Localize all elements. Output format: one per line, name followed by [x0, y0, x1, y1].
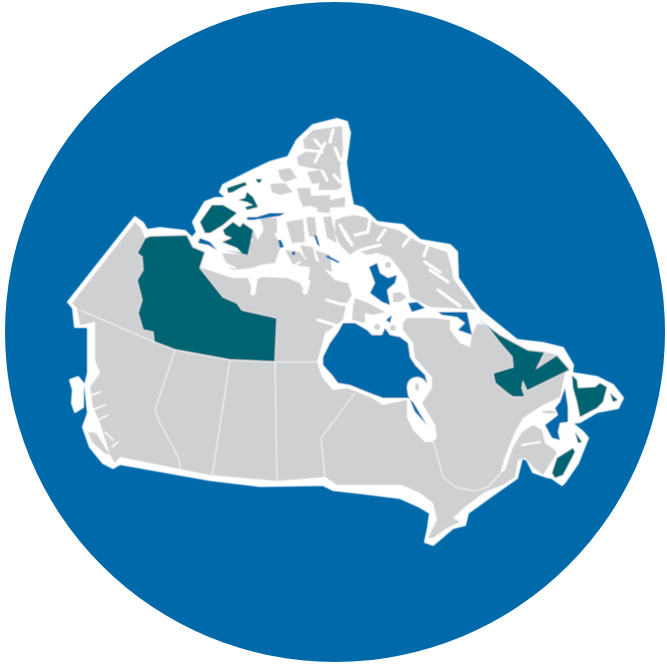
- Foxe Basin: [369, 263, 397, 305]
- map of Canada: [68, 119, 623, 545]
- highlighted region: Arctic islands: [200, 179, 262, 255]
- Vancouver Island: [88, 432, 110, 455]
- Foxe Peninsula: [393, 292, 407, 302]
- highlighted region: Northwest Territories: [137, 235, 277, 362]
- Devon: [307, 193, 345, 208]
- Hudson Strait waters: [386, 302, 472, 335]
- white coastline silhouette: [68, 119, 623, 545]
- highlighted region: Nova Scotia: [552, 432, 582, 478]
- James Bay island: [407, 377, 427, 397]
- highlighted region: Labrador: [479, 319, 570, 397]
- provincial and territorial borders: [80, 310, 500, 491]
- Arctic channels: [198, 213, 340, 263]
- Hudson Bay: [323, 323, 427, 425]
- small islands: [278, 168, 297, 182]
- Melville Peninsula: [352, 298, 385, 323]
- Ellesmere: [297, 126, 343, 190]
- grey arctic islands: [88, 126, 556, 455]
- highlighted region: Newfoundland: [572, 375, 618, 417]
- white fjords and inlets: [92, 130, 540, 447]
- grey mainland: [72, 222, 570, 538]
- Baffin: [335, 215, 477, 310]
- Gulf of St. Lawrence: [545, 388, 568, 440]
- St. Lawrence River: [500, 418, 533, 474]
- Victoria east: [222, 222, 280, 270]
